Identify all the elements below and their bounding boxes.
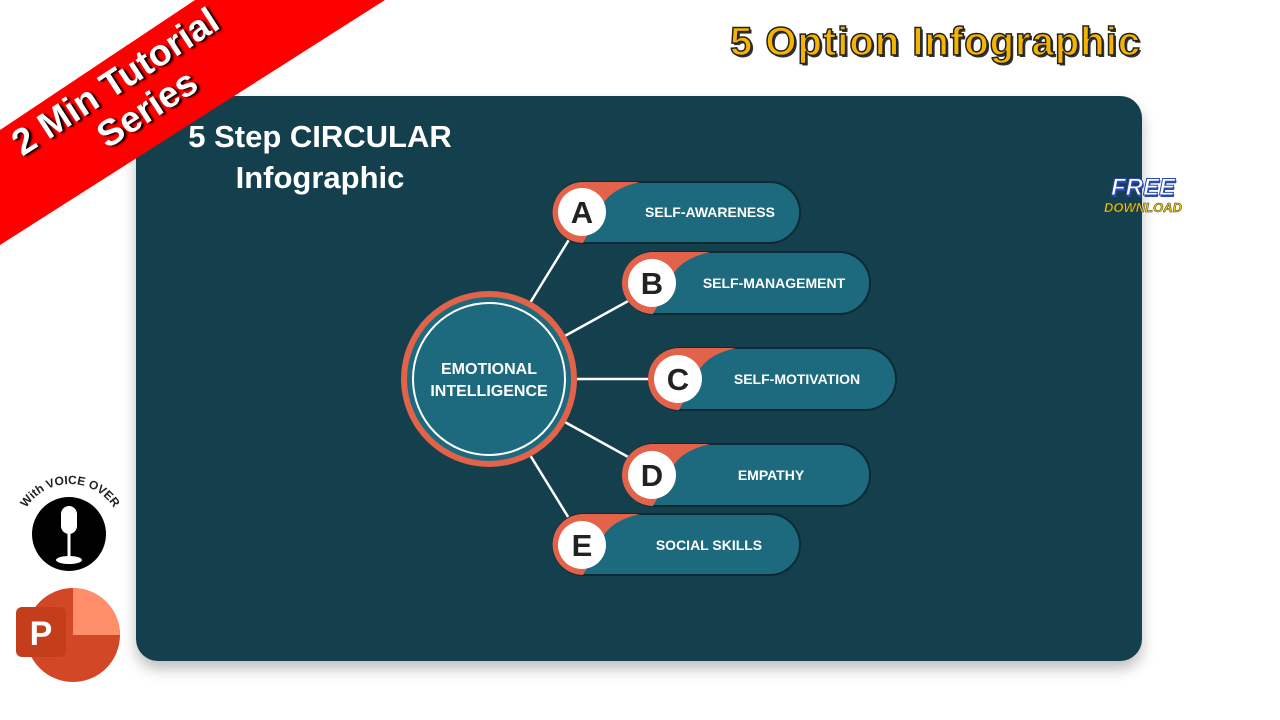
badge: free download: FREE bbox=[1111, 174, 1175, 201]
banner: 2 Min Tutorial Series: Series bbox=[89, 61, 205, 156]
panel: main slide bbox=[136, 96, 1142, 661]
option B: SELF-MANAGEMENT bbox=[703, 275, 846, 291]
connectors bbox=[530, 238, 650, 520]
option E bbox=[553, 514, 800, 575]
badge: free download bbox=[1104, 174, 1182, 215]
banner: 2 Min Tutorial Series bbox=[0, 0, 385, 245]
heading: 5 Step Circular Infographic: Infographic bbox=[236, 160, 404, 195]
option D bbox=[622, 444, 870, 506]
option D: D bbox=[641, 458, 663, 493]
heading: 5 Step Circular Infographic: 5 Step CIRCULAR bbox=[188, 119, 452, 154]
option C: SELF-MOTIVATION bbox=[734, 371, 860, 387]
option A bbox=[552, 182, 800, 243]
icon: powerpoint logo: P bbox=[30, 615, 52, 653]
option A: A bbox=[571, 195, 593, 230]
option C: C bbox=[667, 362, 689, 397]
title: 5 Option Infographic: 5 Option Infographic bbox=[730, 20, 1141, 64]
center circle: Emotional Intelligence: EMOTIONAL bbox=[441, 361, 537, 378]
center circle: Emotional Intelligence: INTELLIGENCE bbox=[430, 383, 548, 400]
center circle: Emotional Intelligence bbox=[401, 291, 577, 467]
option D: EMPATHY bbox=[738, 467, 805, 483]
option C bbox=[648, 348, 896, 410]
option E: SOCIAL SKILLS bbox=[656, 537, 762, 553]
heading: 5 Step Circular Infographic bbox=[188, 119, 452, 195]
badge: free download: DOWNLOAD bbox=[1104, 200, 1182, 215]
option E: E bbox=[572, 528, 592, 563]
icon: voice over microphone bbox=[20, 476, 120, 571]
option A: SELF-AWARENESS bbox=[645, 204, 775, 220]
icon: powerpoint logo bbox=[16, 588, 120, 682]
option B bbox=[622, 252, 870, 314]
banner: 2 Min Tutorial Series: 2 Min Tutorial bbox=[4, 0, 226, 163]
option B: B bbox=[641, 266, 663, 301]
